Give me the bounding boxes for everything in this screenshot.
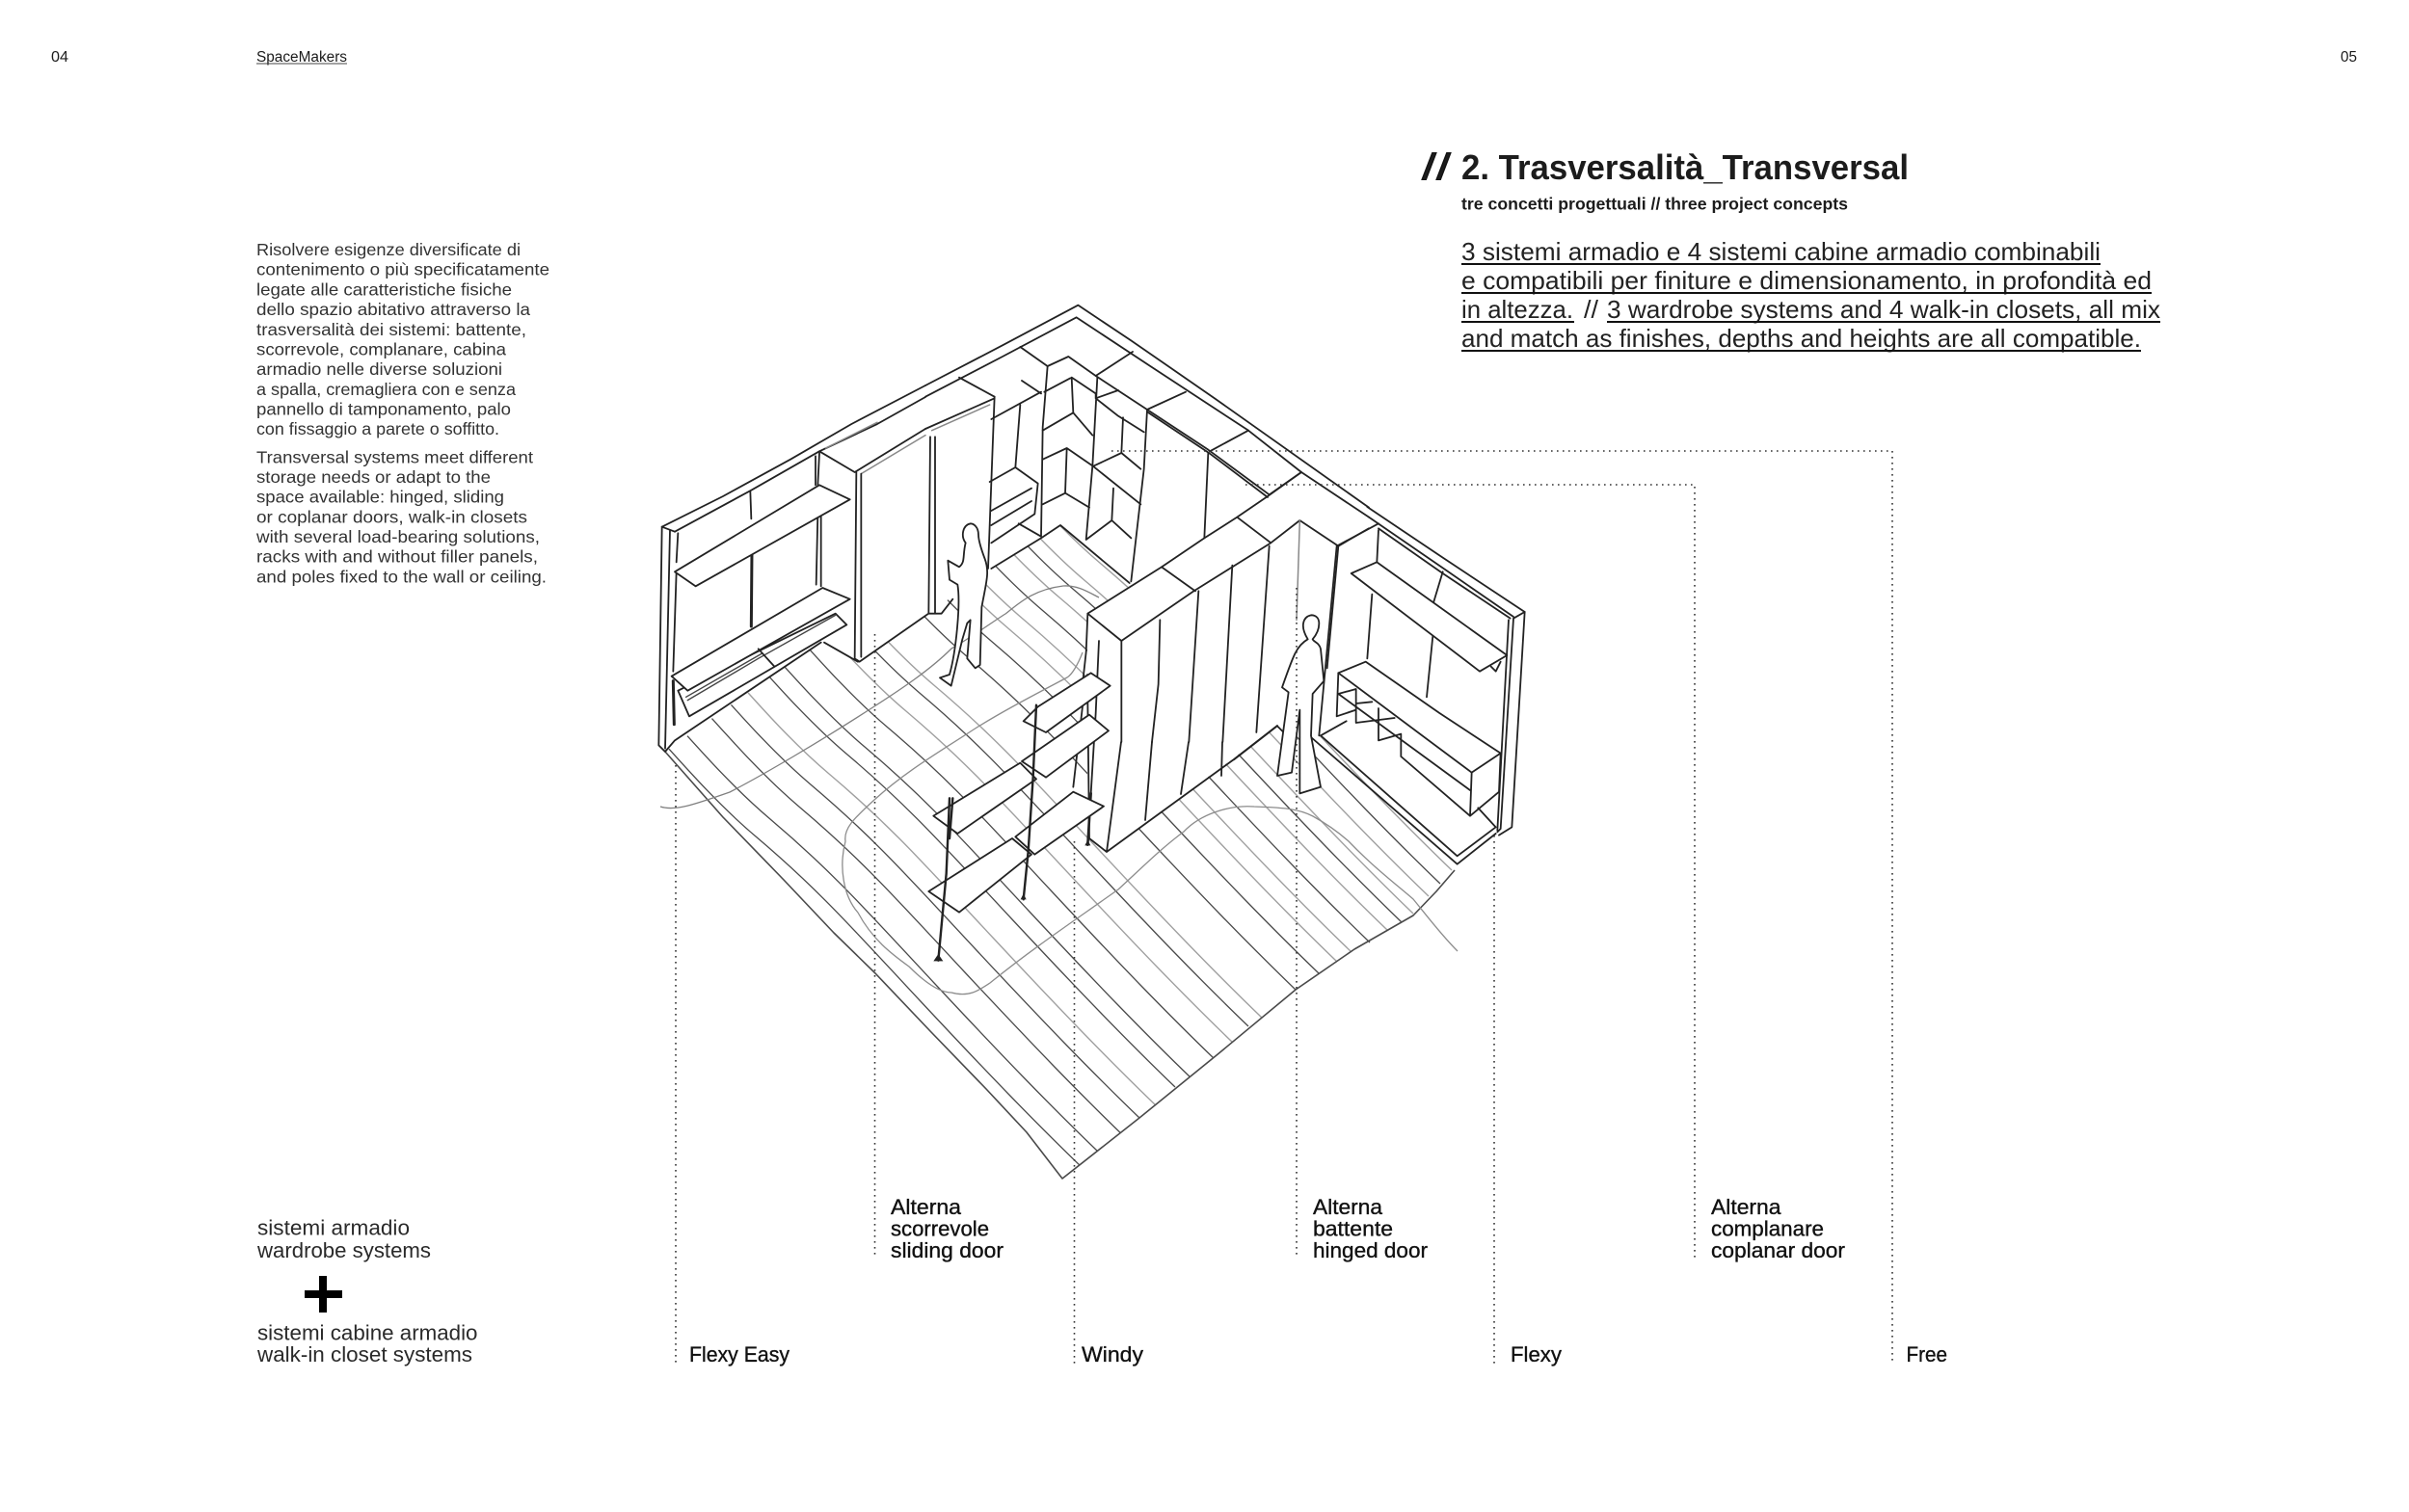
page number right: 05: [2341, 49, 2357, 66]
right bay with shelf and desk, traced on a 3x crop: [1234, 507, 1525, 864]
wall end: [1497, 612, 1525, 836]
wall top outer edge: [1367, 507, 1525, 612]
label: Flexy: Flexy: [1511, 1342, 1563, 1366]
text block: Italian and English description: a spalla, cremagliera con e senza: [256, 380, 516, 399]
rack poles behind: [1073, 641, 1099, 793]
leader lines: dotted connectors: [676, 451, 1892, 1364]
underlined summary paragraph: in altezza.: [1461, 295, 1573, 324]
back floor edge: [991, 525, 1130, 583]
text block: Italian and English description: and poles fixed to the wall or ceiling.: [256, 568, 547, 587]
label: Alterna sliding door: sliding door: [891, 1238, 1004, 1262]
label: walk-in closet systems: [256, 1321, 478, 1366]
label: Alterna coplanar door: coplanar door: [1711, 1238, 1846, 1262]
label: Alterna hinged door: Alterna: [1313, 1195, 1382, 1219]
underlined summary paragraph: //: [1584, 295, 1599, 324]
partition and right wall white mask: [1087, 472, 1525, 864]
label: Alterna sliding door: [891, 1195, 1004, 1262]
hand-drawn curved route on floor: [660, 586, 1099, 809]
person right: [1277, 615, 1324, 793]
title: 2. Trasversalità_Transversal: [1461, 147, 1909, 187]
left bay of wardrobe, traced on a 3x crop: [658, 385, 952, 752]
label: walk-in closet systems: walk-in closet systems: [256, 1342, 472, 1366]
text block: Italian and English description: con fissaggio a parete o soffitto.: [256, 419, 499, 438]
underlined summary paragraph: [1461, 237, 2160, 353]
label: Flexy Easy: Flexy Easy: [689, 1342, 790, 1366]
text block: Italian and English description: space available: hinged, sliding: [256, 488, 504, 507]
label: wardrobe systems: sistemi armadio: [257, 1216, 410, 1240]
text block: Italian and English description: [255, 240, 549, 587]
floor outline: [665, 752, 1455, 1179]
text block: Italian and English description: Risolvere esigenze diversificate di: [256, 240, 521, 259]
text block: Italian and English description: contenimento o più specificatamente: [256, 260, 549, 279]
wall top edges: [925, 305, 1369, 517]
text block: Italian and English description: with several load-bearing solutions,: [255, 527, 540, 546]
rear panel: [1204, 453, 1208, 538]
icon: plus: [305, 1276, 342, 1313]
label: Alterna sliding door: scorrevole: [891, 1217, 989, 1241]
partition top band: [1087, 472, 1369, 641]
back panel lines: [1319, 523, 1443, 735]
corner storage and partition, traced on a 3x crop: [925, 305, 1369, 742]
text block: Italian and English description: legate alle caratteristiche fisiche: [256, 279, 512, 299]
underlined summary paragraph: and match as finishes, depths and heights are all compatible.: [1461, 324, 2141, 353]
recessed cornice: [1048, 357, 1270, 497]
sketch: isometric room with wardrobe systems: [657, 305, 1526, 1180]
partition door lines: [1083, 546, 1338, 742]
text block: Italian and English description: dello spazio abitativo attraverso la: [256, 300, 530, 319]
underlined summary paragraph: 3 sistemi armadio e 4 sistemi cabine armadio combinabili: [1461, 237, 2101, 266]
partition lower edge: [1087, 675, 1277, 852]
text block: Italian and English description: storage needs or adapt to the: [256, 467, 491, 487]
left wall end: [658, 527, 821, 752]
label: Alterna coplanar door: Alterna: [1711, 1195, 1781, 1219]
label: wardrobe systems: wardrobe systems: [256, 1238, 431, 1262]
upper shelf: [1352, 562, 1507, 672]
hand-drawn rounded floor zone: [843, 652, 1458, 995]
page number left: 04: [51, 49, 68, 66]
rack shelves: [1024, 673, 1111, 732]
left storage column: [990, 366, 1048, 543]
label: wardrobe systems: [256, 1216, 431, 1262]
label: Alterna hinged door: [1313, 1195, 1428, 1262]
label: Alterna coplanar door: complanare: [1711, 1217, 1824, 1241]
corner open shelves: [1043, 378, 1147, 581]
text block: Italian and English description: or coplanar doors, walk-in closets: [256, 508, 527, 527]
label: Alterna hinged door: battente: [1313, 1217, 1393, 1241]
label: Alterna hinged door: hinged door: [1313, 1238, 1428, 1262]
text block: Italian and English description: racks with and without filler panels,: [256, 547, 538, 567]
title: //: [1422, 147, 1452, 188]
person left: [940, 523, 987, 686]
label: Free: Free: [1907, 1342, 1947, 1366]
underlined summary paragraph: e compatibili per finiture e dimensionamento, in profondità ed: [1461, 266, 2152, 295]
floor stripes: [669, 526, 1452, 1165]
underlined summary paragraph: 3 wardrobe systems and 4 walk-in closets, all mix: [1607, 295, 2160, 324]
rack poles front: [938, 705, 1036, 961]
first door panel: [819, 429, 952, 662]
upright posts: [750, 453, 821, 586]
lower shelf and rail: [678, 614, 846, 716]
pole feet: [933, 840, 1090, 961]
label: walk-in closet systems: sistemi cabine armadio: [257, 1321, 478, 1345]
label: Alterna sliding door: Alterna: [891, 1195, 961, 1219]
text block: Italian and English description: scorrevole, complanare, cabina: [256, 339, 506, 358]
label: Windy: Windy: [1082, 1342, 1144, 1366]
running header: SpaceMakers: [256, 49, 347, 66]
low cabinet: [1338, 662, 1501, 773]
upper shelf: [675, 485, 850, 586]
label: Alterna coplanar door: [1711, 1195, 1846, 1262]
text block: Italian and English description: armadio nelle diverse soluzioni: [256, 359, 502, 379]
Flexy rack with shelves, traced on a 3x crop: [928, 641, 1111, 961]
subtitle: tre concetti progettuali // three project concepts: [1461, 195, 1848, 214]
text block: Italian and English description: trasversalità dei sistemi: battente,: [256, 320, 526, 339]
wall top edges: [662, 385, 925, 532]
text block: Italian and English description: pannello di tamponamento, palo: [256, 399, 511, 418]
floor plinth: [1311, 721, 1496, 864]
text block: Italian and English description: Transversal systems meet different: [256, 448, 533, 467]
